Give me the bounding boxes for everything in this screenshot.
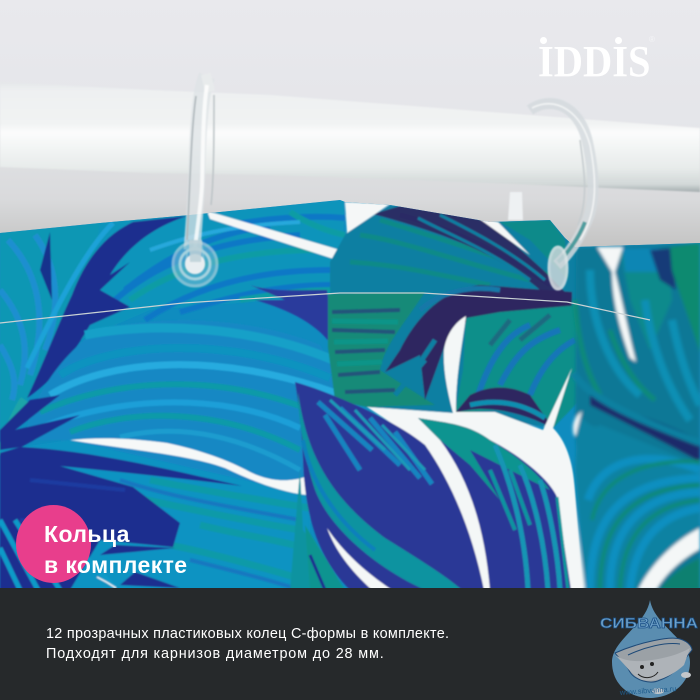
wall background (0, 0, 700, 140)
top centre leaf (328, 205, 580, 428)
white big leaf base (367, 316, 583, 590)
ring left (173, 74, 217, 286)
white small stripe (478, 218, 530, 255)
badge: pink circle (16, 505, 91, 583)
watermark name: СИБВАННА (600, 615, 698, 632)
navy leaf centre-bottom (295, 382, 484, 590)
navy lower left (0, 447, 242, 590)
left small leaf (0, 223, 100, 430)
white vein (70, 438, 307, 495)
green lower left block (328, 292, 435, 407)
badge text (44, 521, 187, 578)
navy midrib (27, 216, 187, 398)
right block (455, 305, 578, 428)
top left leaf stripes (80, 200, 345, 340)
bright big leaf (25, 320, 338, 495)
curtain fabric with leaf print (0, 190, 700, 590)
stitched hem line (0, 293, 650, 323)
shower rod (0, 82, 700, 192)
white stripe (206, 212, 338, 260)
description text: Подходят для карнизов диаметром до 28 мм. (46, 646, 385, 662)
bottom panel (0, 588, 700, 700)
icon: water drop (612, 600, 690, 698)
navy block near hem (250, 285, 328, 340)
brand logo: IDDIS (538, 37, 650, 86)
description text (46, 626, 449, 662)
small hook behind curtain (508, 192, 523, 220)
badge text: Кольца (44, 521, 130, 547)
right panel leaf (558, 243, 700, 590)
inner leaf (418, 418, 571, 590)
brand logo: ® (649, 35, 655, 44)
purple centre (385, 285, 572, 400)
icon: bathtub (615, 638, 692, 694)
badge text: в комплекте (44, 552, 187, 578)
watermark logo: Sibvanna (600, 600, 698, 698)
ring right (530, 103, 595, 289)
site url: www.sibvanna.ru (619, 684, 677, 697)
description text: 12 прозрачных пластиковых колец С-формы в комплекте. (46, 626, 449, 642)
shadow wall below rod (0, 130, 700, 255)
white top triangle (345, 202, 390, 233)
lower left area (0, 440, 310, 590)
light blue midrib (27, 223, 113, 368)
